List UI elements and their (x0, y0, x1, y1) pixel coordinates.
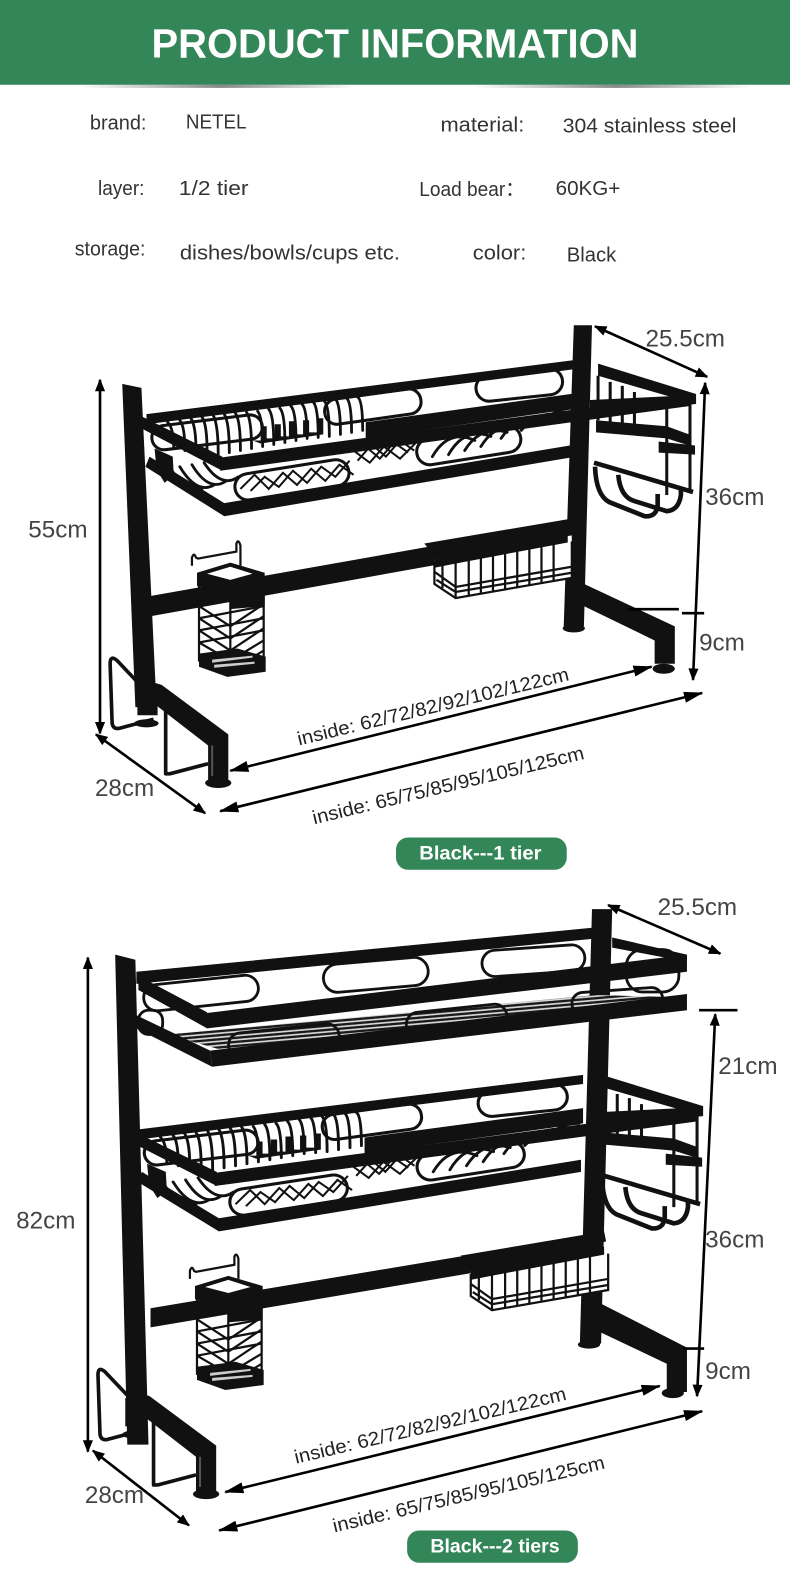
label: 55cm: 55cm (28, 516, 88, 543)
spec: layer: 1/2 tier (179, 178, 249, 200)
spec: load bear: 60KG+ (556, 178, 620, 200)
spec: storage: storage: (75, 239, 145, 261)
label: 36cm: 36cm (705, 484, 764, 511)
upper shelf (136, 927, 687, 1067)
label: 28cm: 28cm (95, 775, 154, 802)
spec: material (440, 114, 736, 137)
product specification table (75, 111, 736, 267)
title: PRODUCT INFORMATION (152, 21, 638, 67)
spec: color: Black (567, 245, 617, 267)
rack drawing: 2 tiers (98, 909, 703, 1499)
badge: Black 1 tier: Black---1 tier (419, 844, 542, 865)
dimension arrows: 2 tiers (88, 905, 737, 1530)
dimension arrows: 1 tier (96, 326, 707, 813)
label: 36cm: 36cm (705, 1227, 764, 1254)
label: outside width: inside: 65/75/85/95/105/125cm (310, 743, 586, 829)
spec: load bear (419, 178, 620, 201)
spec: storage: dishes/bowls/cups etc. (180, 243, 400, 265)
badge: Black 2 tiers (407, 1530, 578, 1563)
spec: color: color: (473, 243, 526, 265)
label: 25.5cm: 25.5cm (658, 894, 737, 921)
spec: load bear: Load bear： (419, 179, 524, 201)
spec: layer (98, 178, 249, 200)
label: 25.5cm: 25.5cm (646, 325, 725, 352)
spec: brand: NETEL (186, 111, 246, 133)
spec: brand (90, 111, 246, 134)
spec: material: 304 stainless steel (563, 115, 736, 137)
badge: Black 2 tiers: Black---2 tiers (430, 1537, 560, 1558)
rack drawing: 1 tier (110, 325, 696, 788)
spec: brand: brand: (90, 112, 146, 134)
spec: storage (75, 239, 400, 265)
spec: layer: layer: (98, 178, 144, 200)
label: 21cm: 21cm (718, 1053, 778, 1080)
label: 9cm: 9cm (705, 1358, 751, 1385)
label: 28cm: 28cm (85, 1482, 144, 1509)
spec: material: material: (440, 114, 524, 136)
product image: 1 tier rack with dimensions (28, 325, 764, 829)
spec: color (473, 243, 617, 267)
badge: Black 1 tier (396, 837, 567, 870)
label: outside width: inside: 65/75/85/95/105/125cm (331, 1453, 607, 1537)
product image: 2 tier rack with dimensions (16, 894, 778, 1537)
label: inside width: inside: 62/72/82/92/102/122cm (295, 664, 571, 750)
label: 9cm: 9cm (699, 630, 745, 657)
header banner (0, 0, 790, 88)
label: 82cm: 82cm (16, 1207, 75, 1234)
label: inside width: inside: 62/72/82/92/102/122cm (292, 1384, 568, 1469)
